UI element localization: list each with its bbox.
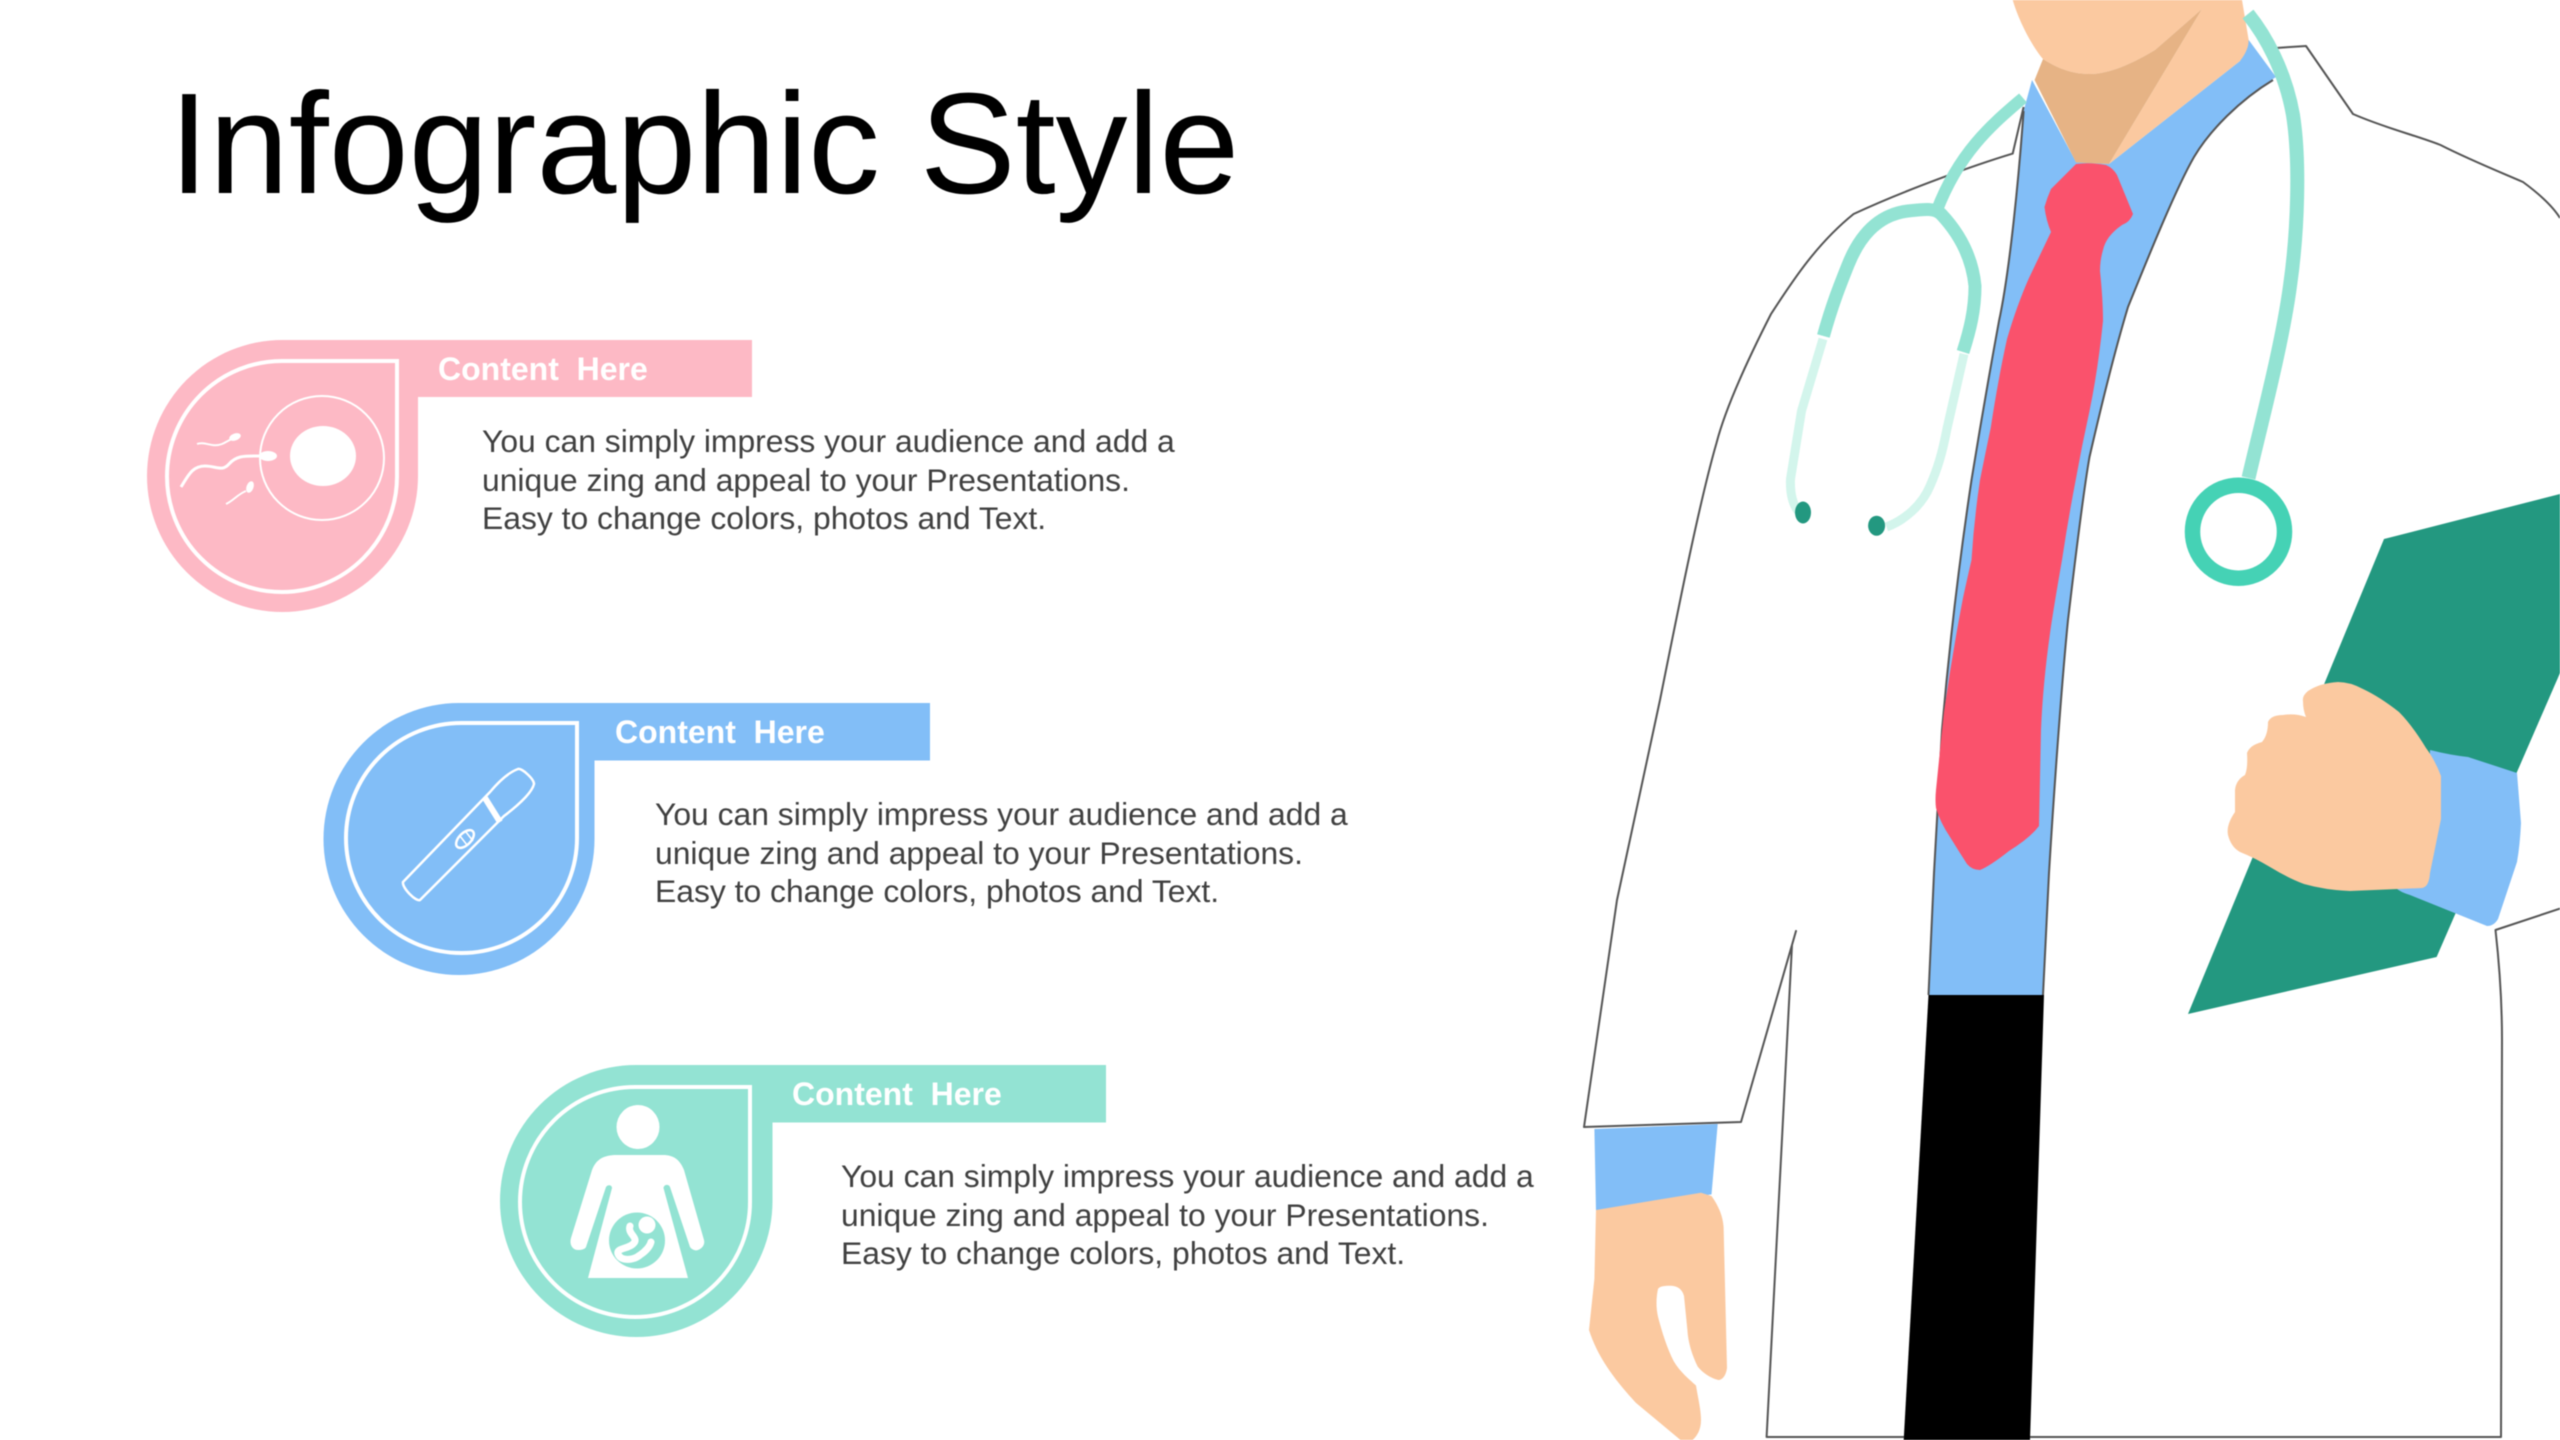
header text: Content Here <box>792 1076 1002 1112</box>
coat outline <box>1584 46 2560 1437</box>
teardrop badge <box>147 340 418 612</box>
teardrop badge <box>500 1065 772 1337</box>
inner teardrop outline <box>346 723 577 953</box>
icon: egg and sperm <box>181 396 384 520</box>
left hand <box>1589 1193 1727 1440</box>
header text: Content Here <box>615 714 825 750</box>
teardrop badge <box>324 703 594 975</box>
header text: Content Here <box>438 351 648 387</box>
body text: Easy to change colors, photos and Text. <box>841 1235 1405 1271</box>
header bar <box>772 1065 1106 1122</box>
body text <box>655 796 1348 909</box>
trousers <box>1904 995 2044 1440</box>
shirt <box>1928 39 2276 995</box>
chest piece ring <box>2192 485 2284 578</box>
left cuff <box>1594 1124 1718 1212</box>
right cuff <box>2396 750 2521 926</box>
body text <box>482 423 1175 536</box>
icon: pregnant woman <box>570 1105 704 1278</box>
body text: unique zing and appeal to your Presentations. <box>841 1197 1489 1233</box>
panel: content 3 teal <box>500 1065 1534 1337</box>
body text: You can simply impress your audience and add a <box>841 1158 1534 1194</box>
body text: unique zing and appeal to your Presentations. <box>482 462 1130 498</box>
body text: Easy to change colors, photos and Text. <box>482 500 1046 536</box>
tie <box>1936 163 2133 870</box>
panel: content 1 pink <box>147 340 1175 612</box>
icon: pregnancy test <box>403 769 534 900</box>
body text <box>841 1158 1534 1271</box>
body text: You can simply impress your audience and add a <box>482 423 1175 459</box>
right hand <box>2228 682 2441 891</box>
body text: You can simply impress your audience and add a <box>655 796 1348 832</box>
illustration: doctor <box>1584 0 2560 1440</box>
header bar <box>418 340 752 397</box>
lower light tubes <box>1790 339 1823 511</box>
stethoscope <box>1790 14 2297 578</box>
clipboard <box>2188 494 2560 1014</box>
ear tips <box>1795 502 1811 524</box>
panel: content 2 blue <box>324 703 1348 975</box>
neck shadow <box>2035 9 2202 164</box>
upper left tubes <box>1937 98 2023 210</box>
body text: unique zing and appeal to your Presentations. <box>655 835 1303 871</box>
inner teardrop outline <box>167 361 397 592</box>
header bar <box>594 703 930 760</box>
body text: Easy to change colors, photos and Text. <box>655 873 1219 909</box>
neck and face <box>2013 0 2249 164</box>
title: Infographic Style <box>169 64 1239 224</box>
inner teardrop outline <box>520 1087 750 1317</box>
right tube <box>2248 14 2297 478</box>
